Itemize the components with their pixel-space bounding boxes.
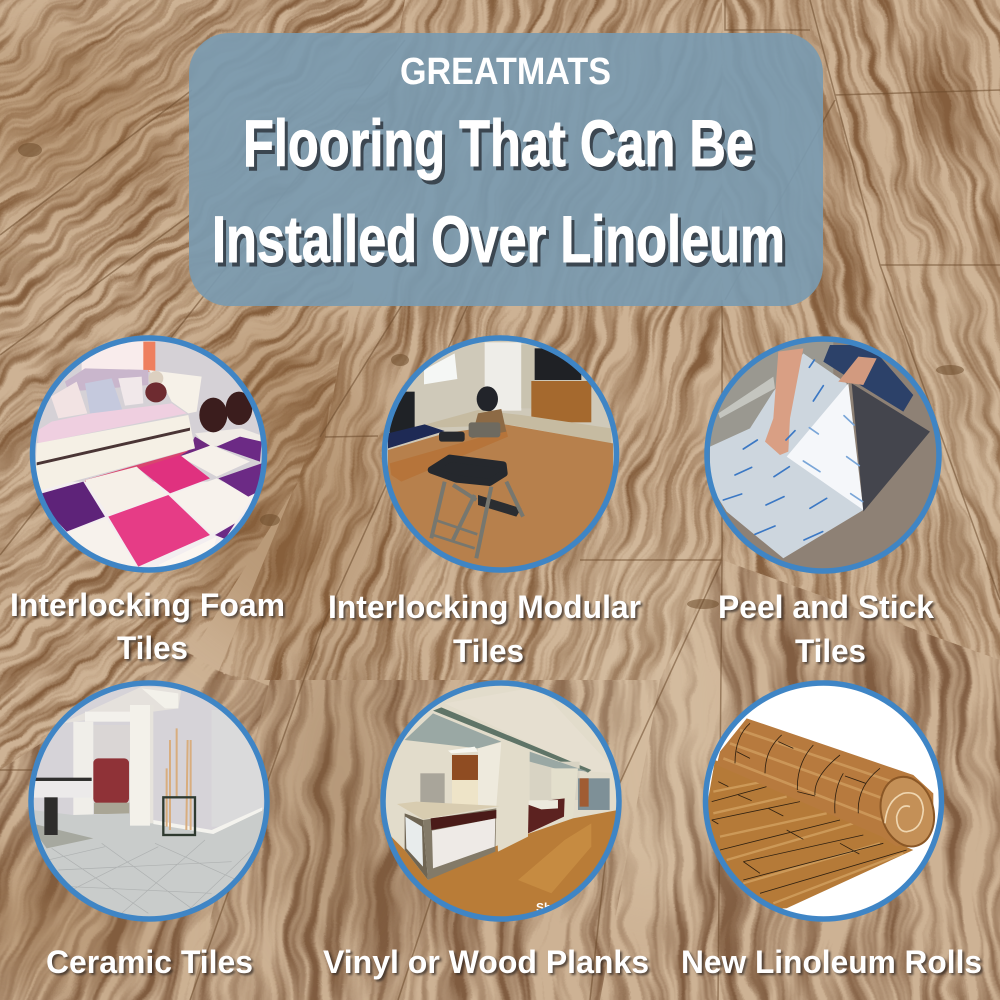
label: interlocking modular tiles: Interlocking Modular [328,589,641,625]
circle photo: vinyl or wood planks [378,680,623,920]
title: Installed Over Linoleum [212,202,785,276]
circle photo: vinyl or wood planks: Sh [536,901,551,915]
title [212,106,785,276]
label: vinyl or wood planks: Vinyl or Wood Planks [323,944,649,980]
label: peel and stick tiles: Tiles [795,633,866,669]
label: interlocking foam tiles: Interlocking Foam [10,587,285,623]
circle photo: new linoleum rolls [700,680,945,920]
circle photo: peel and stick tiles [700,335,945,575]
label: new linoleum rolls: New Linoleum Rolls [681,944,982,980]
circle photo: interlocking modular tiles [378,335,623,575]
label: interlocking foam tiles [10,587,285,666]
label: interlocking foam tiles: Tiles [117,630,188,666]
label: ceramic tiles: Ceramic Tiles [46,944,253,980]
label: interlocking modular tiles [328,589,641,669]
label: peel and stick tiles: Peel and Stick [718,589,934,625]
title: Flooring That Can Be [243,106,754,180]
label: interlocking modular tiles: Tiles [453,633,524,669]
title panel [189,33,823,306]
circle photo: ceramic tiles [25,680,270,920]
logo wordmark: GREATMATS [400,51,611,93]
label: peel and stick tiles [718,589,934,669]
circle photo: interlocking foam tiles [25,335,270,575]
